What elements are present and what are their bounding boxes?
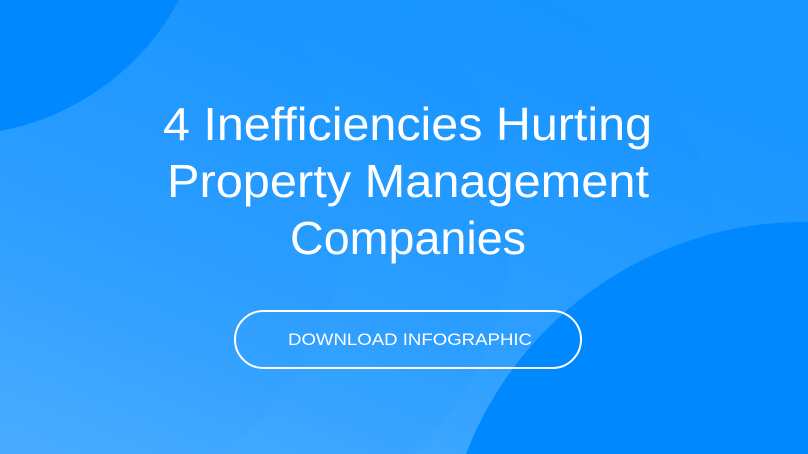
title: Property Management [167,155,649,207]
download button [235,311,581,368]
title [163,98,652,264]
top-left dark circle [0,0,179,131]
bottom-right dark circle [466,222,808,454]
title: 4 Inefficiencies Hurting [163,98,652,150]
title: Companies [290,212,526,264]
download button: DOWNLOAD INFOGRAPHIC [288,330,532,349]
